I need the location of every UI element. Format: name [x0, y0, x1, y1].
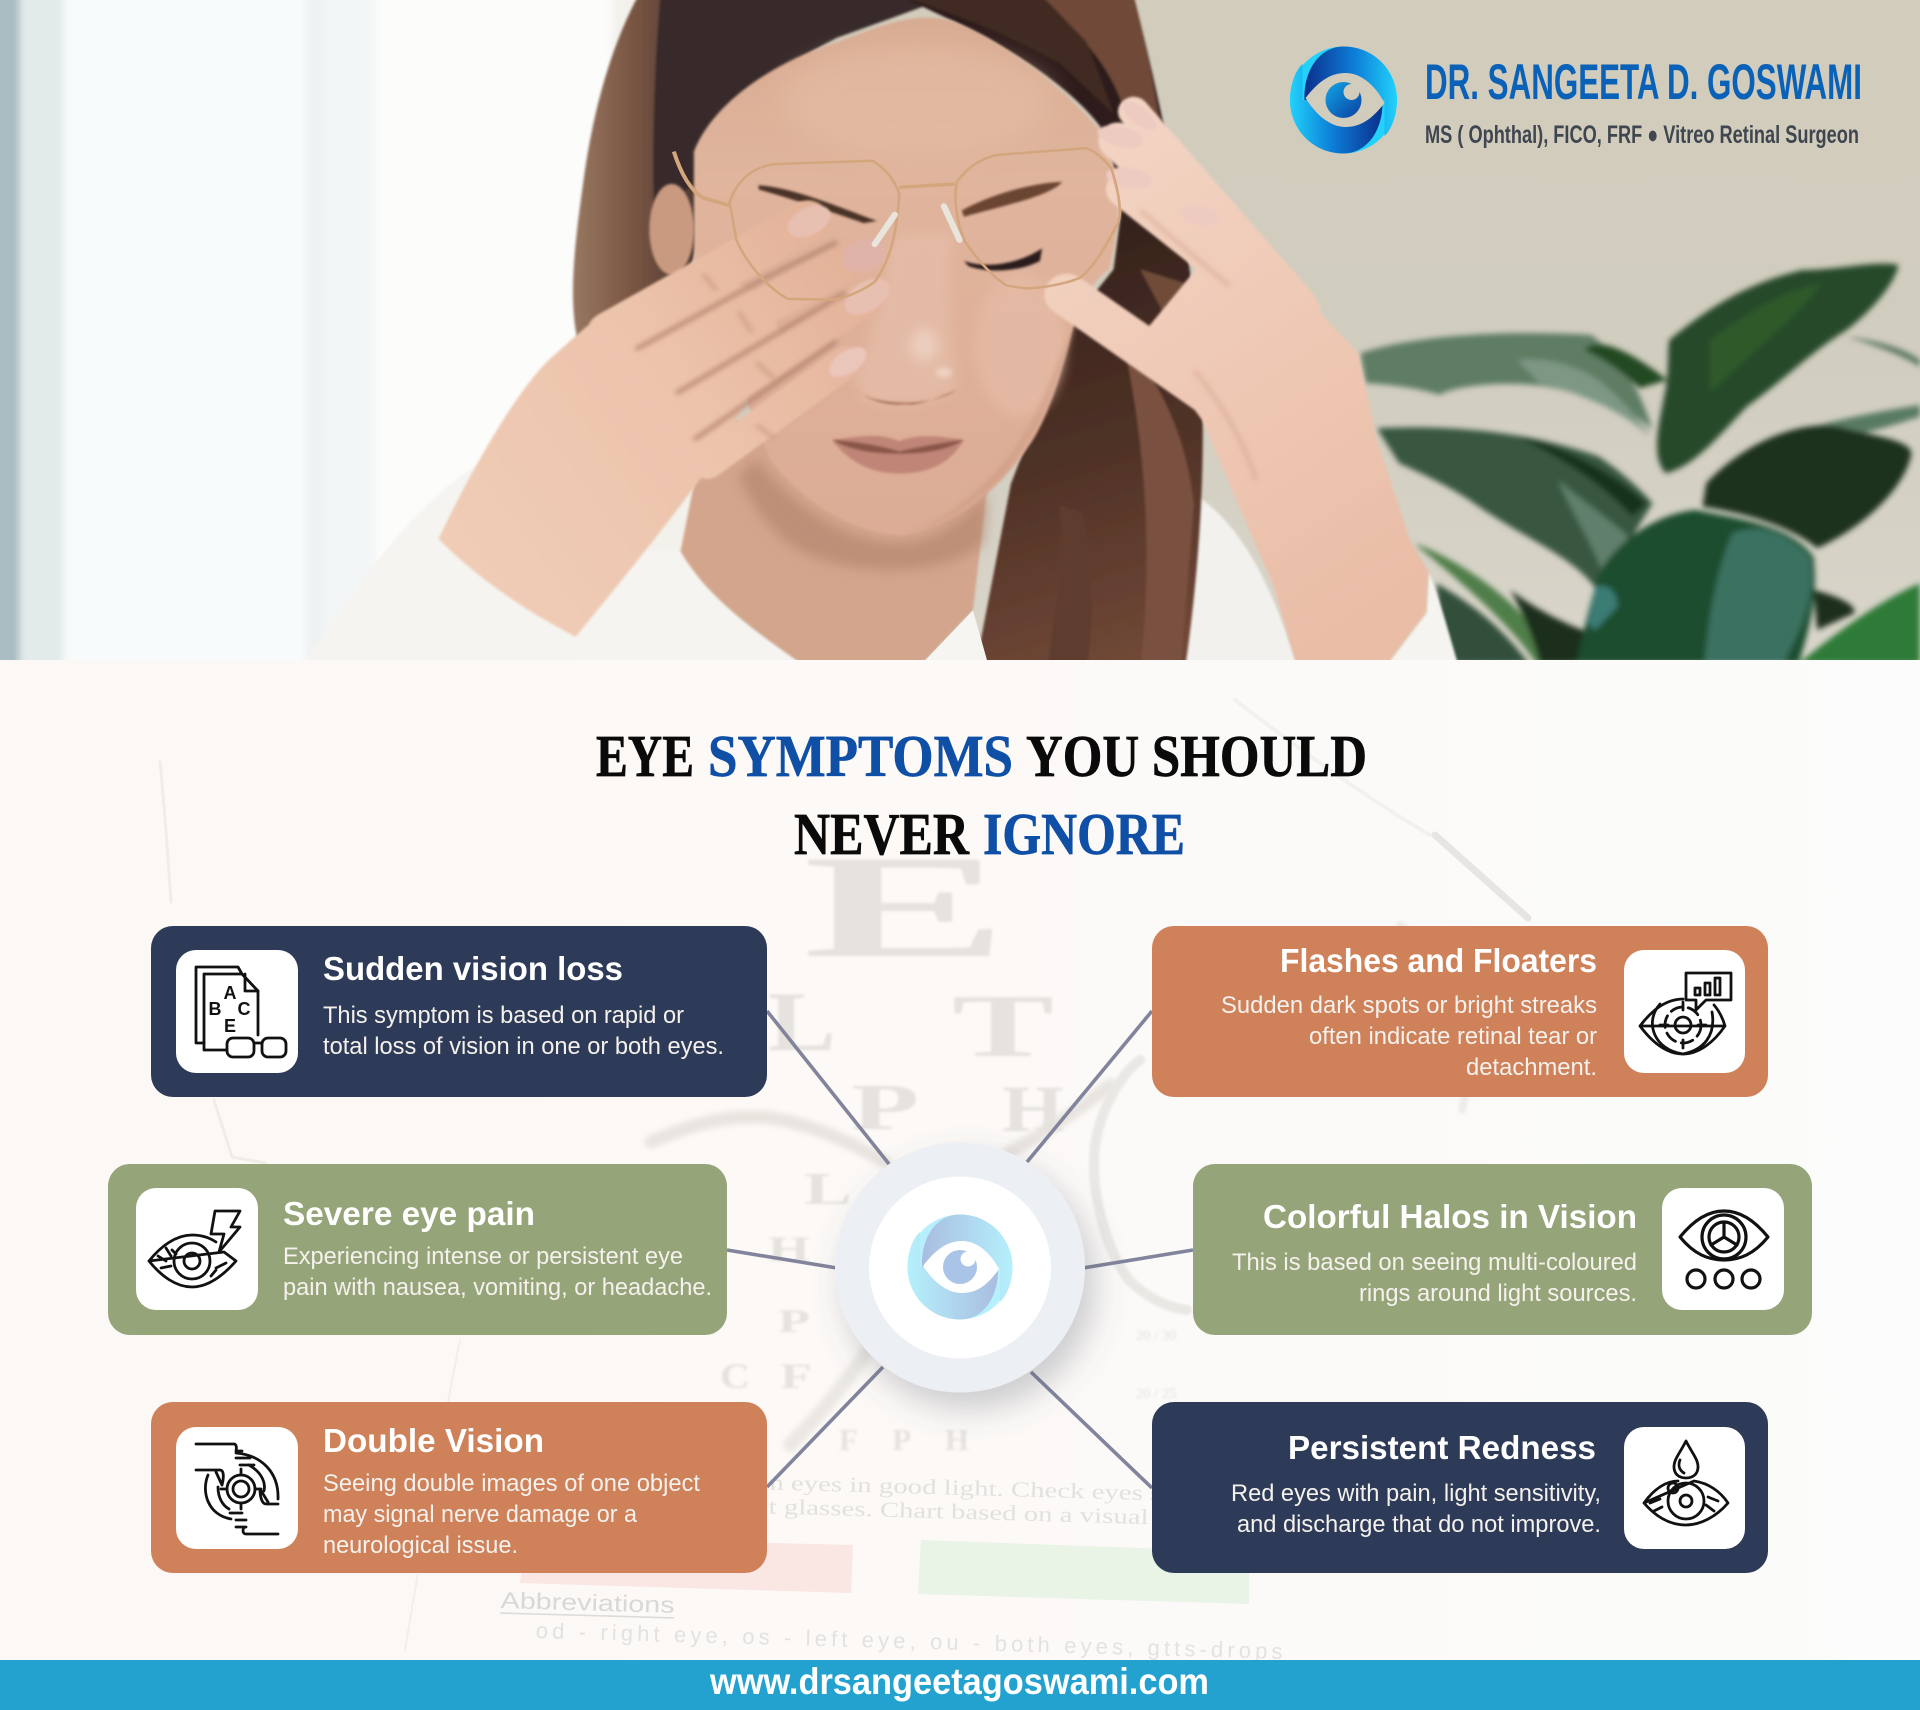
- footer bar with website: www.drsangeetagoswami.com: [709, 1661, 1209, 1702]
- right shirt cuff: [1390, 574, 1459, 660]
- card: Persistent Redness: Persistent Redness: [1288, 1429, 1596, 1466]
- card: Double Vision: neurological issue.: [323, 1532, 518, 1559]
- chart caption: [768, 1470, 1162, 1529]
- card: Severe eye pain: pain with nausea, vomiting, or headache.: [283, 1274, 712, 1301]
- card: Severe eye pain: Severe eye pain: [283, 1195, 535, 1232]
- photo backdrop: window curtain and wall: [0, 0, 1920, 673]
- card: Sudden vision loss: Sudden vision loss: [323, 950, 623, 987]
- title: SYMPTOMS: [708, 723, 1013, 789]
- icon: letter chart and glasses: B: [208, 999, 222, 1019]
- chart letters: P: [778, 1304, 810, 1340]
- connector lines from hub to cards: [727, 1011, 1193, 1488]
- chart letters: H: [768, 1229, 810, 1269]
- faded eye chart and glasses watermark: [160, 700, 1528, 1664]
- chart letters: F: [780, 1356, 812, 1396]
- chart letters: T: [952, 977, 1054, 1076]
- shirt: [378, 471, 1295, 660]
- panel: header photograph of woman rubbing her eyes: [0, 0, 1920, 673]
- right hand holding the frame: [1067, 97, 1429, 669]
- neck: [681, 421, 1006, 669]
- chart letters: [720, 825, 1176, 1457]
- logo: blue eye: [1290, 46, 1397, 154]
- card: Colorful Halos in Vision: This is based on seeing multi-coloured: [1232, 1249, 1637, 1276]
- face: [694, 18, 1118, 535]
- chart letters: L: [768, 975, 836, 1069]
- abbreviations: Abbreviations: [500, 1587, 675, 1618]
- plant behind the woman: [1360, 264, 1920, 663]
- lips: [832, 436, 964, 474]
- woman: drawn in face-crop units: [301, 0, 1459, 673]
- card: Flashes and Floaters: Sudden dark spots or bright streaks: [1221, 992, 1597, 1019]
- ear: [649, 184, 694, 275]
- gold glasses: [674, 148, 1120, 300]
- right palm creases: [1140, 210, 1256, 480]
- chart colour bands: [520, 1537, 853, 1593]
- card: Severe eye pain: [108, 1164, 727, 1335]
- card: Colorful Halos in Vision: Colorful Halos in Vision: [1263, 1198, 1637, 1235]
- card: Sudden vision loss: [151, 926, 767, 1097]
- abbreviations: [499, 1587, 1284, 1664]
- chart letters: P: [851, 1071, 919, 1144]
- card: Sudden vision loss: total loss of vision in one or both eyes.: [323, 1033, 724, 1060]
- card: Double Vision: Double Vision: [323, 1422, 544, 1459]
- title: EYE: [596, 723, 694, 789]
- card: Flashes and Floaters: often indicate retinal tear or: [1309, 1023, 1597, 1050]
- knuckle creases: [703, 274, 774, 438]
- footer bar with website: [0, 1660, 1920, 1710]
- icon: letter chart and glasses: A: [224, 983, 236, 1003]
- icon: eye with lightning bolt: [149, 1211, 240, 1287]
- hair: [573, 0, 1221, 669]
- icon: letter chart and glasses: E: [224, 1016, 236, 1036]
- shirt V-neck wedge: [926, 610, 987, 660]
- eyebrows: [759, 182, 1062, 223]
- card: Persistent Redness: and discharge that do not improve.: [1237, 1511, 1601, 1538]
- icon: eye with drop: [1644, 1441, 1728, 1525]
- chart caption: n eyes in good light. Check eyes s: [769, 1470, 1162, 1505]
- card: Flashes and Floaters: Flashes and Floaters: [1280, 942, 1597, 979]
- chart letters: 20 / 25: [1136, 1386, 1176, 1402]
- title: NEVER: [794, 801, 970, 867]
- title: YOU SHOULD: [1026, 723, 1367, 789]
- icon: eye with three rings: [1680, 1211, 1768, 1288]
- card: Flashes and Floaters: [1152, 926, 1768, 1097]
- chart caption: t glasses. Chart based on a visual: [768, 1494, 1149, 1529]
- card: Double Vision: [151, 1402, 767, 1573]
- logo and doctor credentials: [1290, 46, 1862, 154]
- chart letters: F P H: [839, 1422, 969, 1457]
- card: Colorful Halos in Vision: rings around light sources.: [1359, 1280, 1637, 1307]
- card: Sudden vision loss: This symptom is based on rapid or: [323, 1002, 684, 1029]
- card: Double Vision: Seeing double images of one object: [323, 1470, 700, 1497]
- chart letters: E: [803, 825, 1008, 988]
- card: Double Vision: may signal nerve damage or a: [323, 1501, 638, 1528]
- closed eye lashes: [964, 248, 1042, 271]
- icon: letter chart and glasses: [196, 967, 286, 1057]
- chart letters: H: [1002, 1073, 1064, 1146]
- central hub with pale eye logo: [835, 1142, 1085, 1392]
- card: Persistent Redness: [1152, 1402, 1768, 1573]
- shading between fingers: [636, 242, 846, 440]
- icon: letter chart and glasses: C: [238, 999, 250, 1019]
- chart letters: L: [804, 1163, 852, 1214]
- card: Severe eye pain: Experiencing intense or persistent eye: [283, 1243, 683, 1270]
- card: Colorful Halos in Vision: [1193, 1164, 1812, 1335]
- icon: pale eye logo: [908, 1214, 1012, 1320]
- card: Persistent Redness: Red eyes with pain, light sensitivity,: [1231, 1480, 1601, 1507]
- icon: eye with chart bubble: [1640, 973, 1731, 1054]
- abbreviations: od - right eye, os - left eye, ou - both eyes, gtts-drops: [535, 1618, 1283, 1664]
- title: [596, 723, 1367, 867]
- icon: hands framing an eye: [196, 1444, 278, 1534]
- title: IGNORE: [983, 801, 1185, 867]
- left hand rubbing eye: [439, 199, 896, 637]
- page background: [0, 660, 1920, 1710]
- chart letters: 20 / 30: [1136, 1328, 1176, 1344]
- card: Flashes and Floaters: detachment.: [1466, 1054, 1597, 1081]
- chart letters: C: [720, 1356, 750, 1396]
- neck shadow under chin: [739, 459, 989, 570]
- face shading: [783, 46, 1087, 535]
